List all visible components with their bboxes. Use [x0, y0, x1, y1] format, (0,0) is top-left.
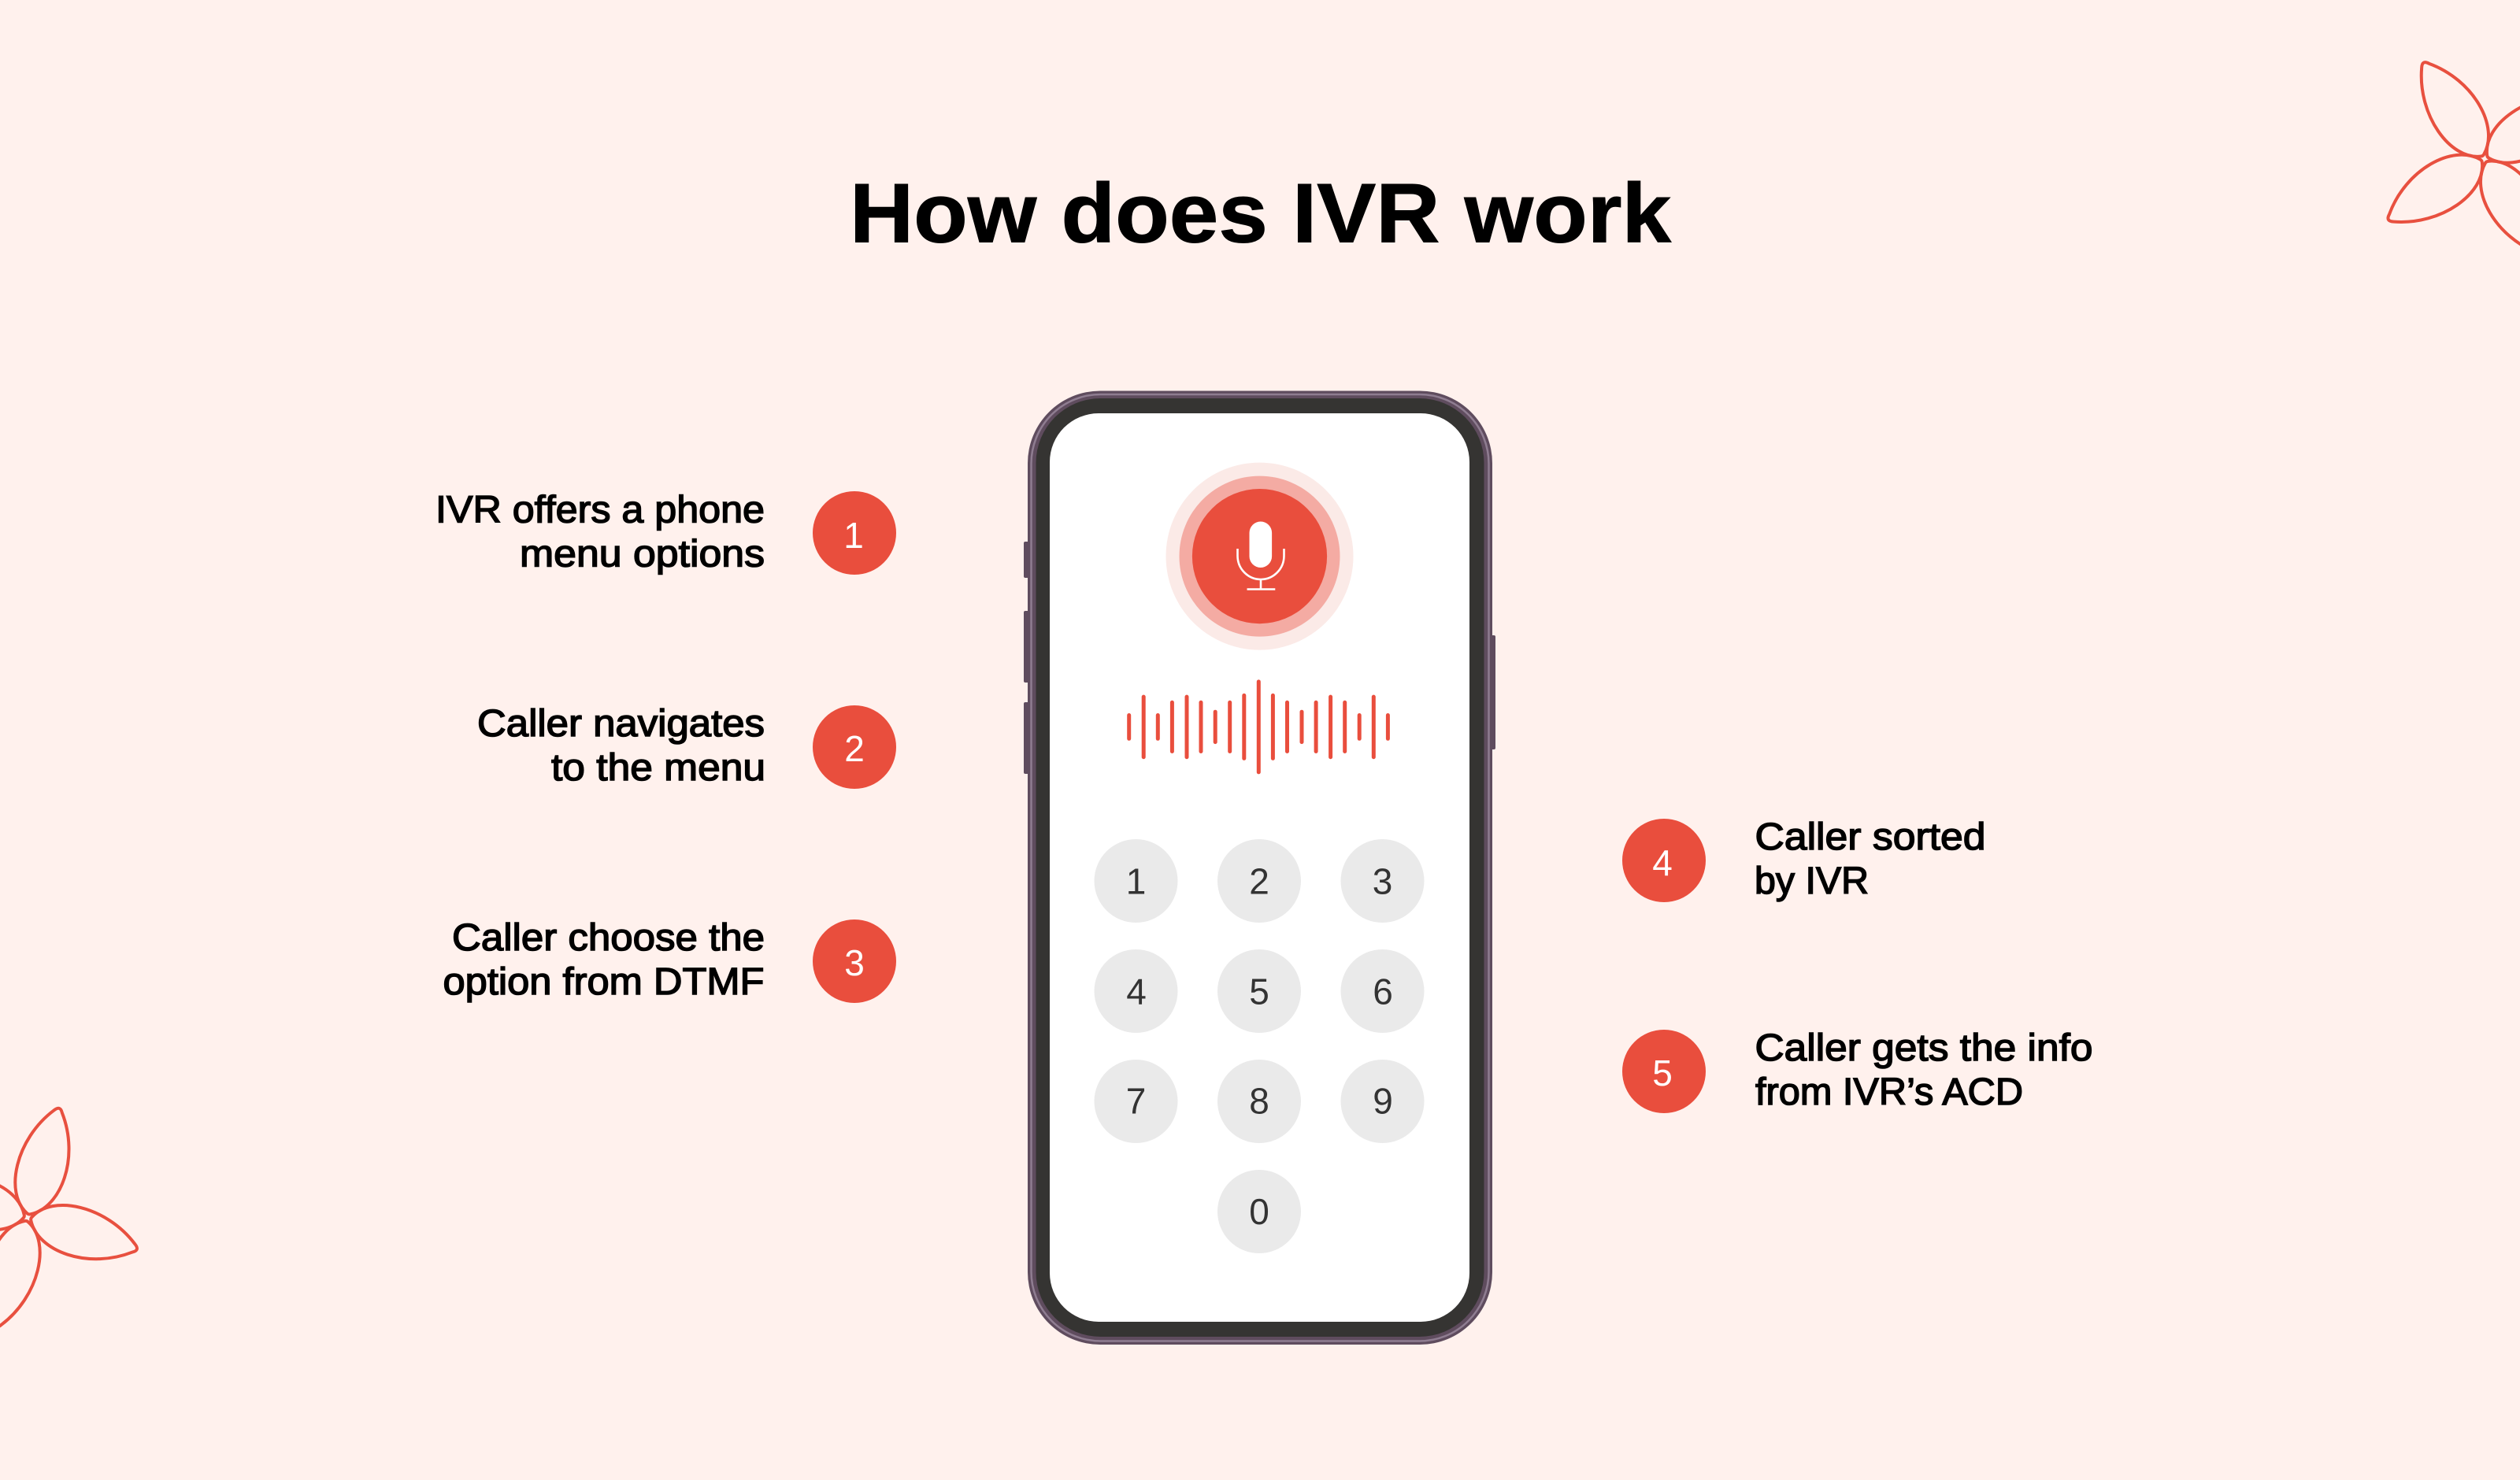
- microphone button: [1166, 463, 1353, 650]
- key 8: 8: [1249, 1080, 1269, 1121]
- step 3 badge: [813, 919, 896, 1003]
- step 4: [1622, 816, 1986, 902]
- key 1: [1095, 839, 1178, 923]
- step 2 badge: [813, 705, 896, 789]
- step 1 text: menu options: [520, 534, 765, 575]
- step 2: [477, 703, 896, 789]
- key 7: [1095, 1060, 1178, 1143]
- step 4 text: by IVR: [1755, 860, 1869, 902]
- step 4 text: [1755, 816, 1986, 902]
- phone: [1024, 390, 1495, 1345]
- decorative flower: bottom left: [0, 1101, 143, 1334]
- step 2 text: [477, 703, 765, 789]
- step 4 badge: 4: [1652, 842, 1673, 883]
- key 0: 0: [1249, 1191, 1269, 1232]
- step 5: [1622, 1027, 2093, 1113]
- icon: microphone: [1238, 521, 1284, 589]
- key 3: 3: [1373, 861, 1392, 902]
- key 5: 5: [1249, 971, 1269, 1012]
- key 4: 4: [1126, 971, 1147, 1012]
- key 4: [1095, 949, 1178, 1033]
- step 2 badge: 2: [844, 728, 865, 769]
- step 3 badge: 3: [844, 942, 865, 983]
- keypad: [1095, 839, 1424, 1253]
- step 3: [443, 917, 896, 1003]
- key 8: [1217, 1060, 1301, 1143]
- key 0: [1217, 1170, 1301, 1253]
- key 3: [1340, 839, 1424, 923]
- key 6: 6: [1373, 971, 1393, 1012]
- step 1 badge: [813, 491, 896, 575]
- phone side buttons: [1024, 542, 1495, 774]
- step 3 text: option from DTMF: [443, 961, 764, 1003]
- key 6: [1340, 949, 1424, 1033]
- step 1 text: IVR offers a phone: [435, 490, 765, 531]
- step 5 text: from IVR’s ACD: [1755, 1071, 2023, 1113]
- step 1 badge: 1: [843, 515, 864, 556]
- step 2 text: to the menu: [551, 747, 765, 789]
- title: How does IVR work: [850, 165, 1672, 260]
- step 5 text: [1755, 1027, 2093, 1113]
- step 5 badge: 5: [1652, 1053, 1673, 1093]
- step 5 badge: [1622, 1030, 1706, 1113]
- step 3 text: Caller choose the: [452, 917, 765, 959]
- key 2: 2: [1249, 861, 1269, 902]
- key 1: 1: [1126, 861, 1146, 902]
- phone body: [1028, 390, 1492, 1345]
- key 9: 9: [1373, 1080, 1393, 1121]
- key 5: [1217, 949, 1301, 1033]
- key 2: [1217, 839, 1301, 923]
- step 4 text: Caller sorted: [1755, 816, 1986, 858]
- step 2 text: Caller navigates: [477, 703, 765, 745]
- step 4 badge: [1622, 819, 1706, 902]
- step 1: [435, 490, 896, 575]
- step 1 text: [435, 490, 765, 575]
- key 7: 7: [1126, 1080, 1146, 1121]
- decorative flower: top right: [2375, 50, 2520, 268]
- step 3 text: [443, 917, 765, 1003]
- sound waveform: [1127, 679, 1390, 774]
- step 5 text: Caller gets the info: [1755, 1027, 2093, 1069]
- key 9: [1340, 1060, 1424, 1143]
